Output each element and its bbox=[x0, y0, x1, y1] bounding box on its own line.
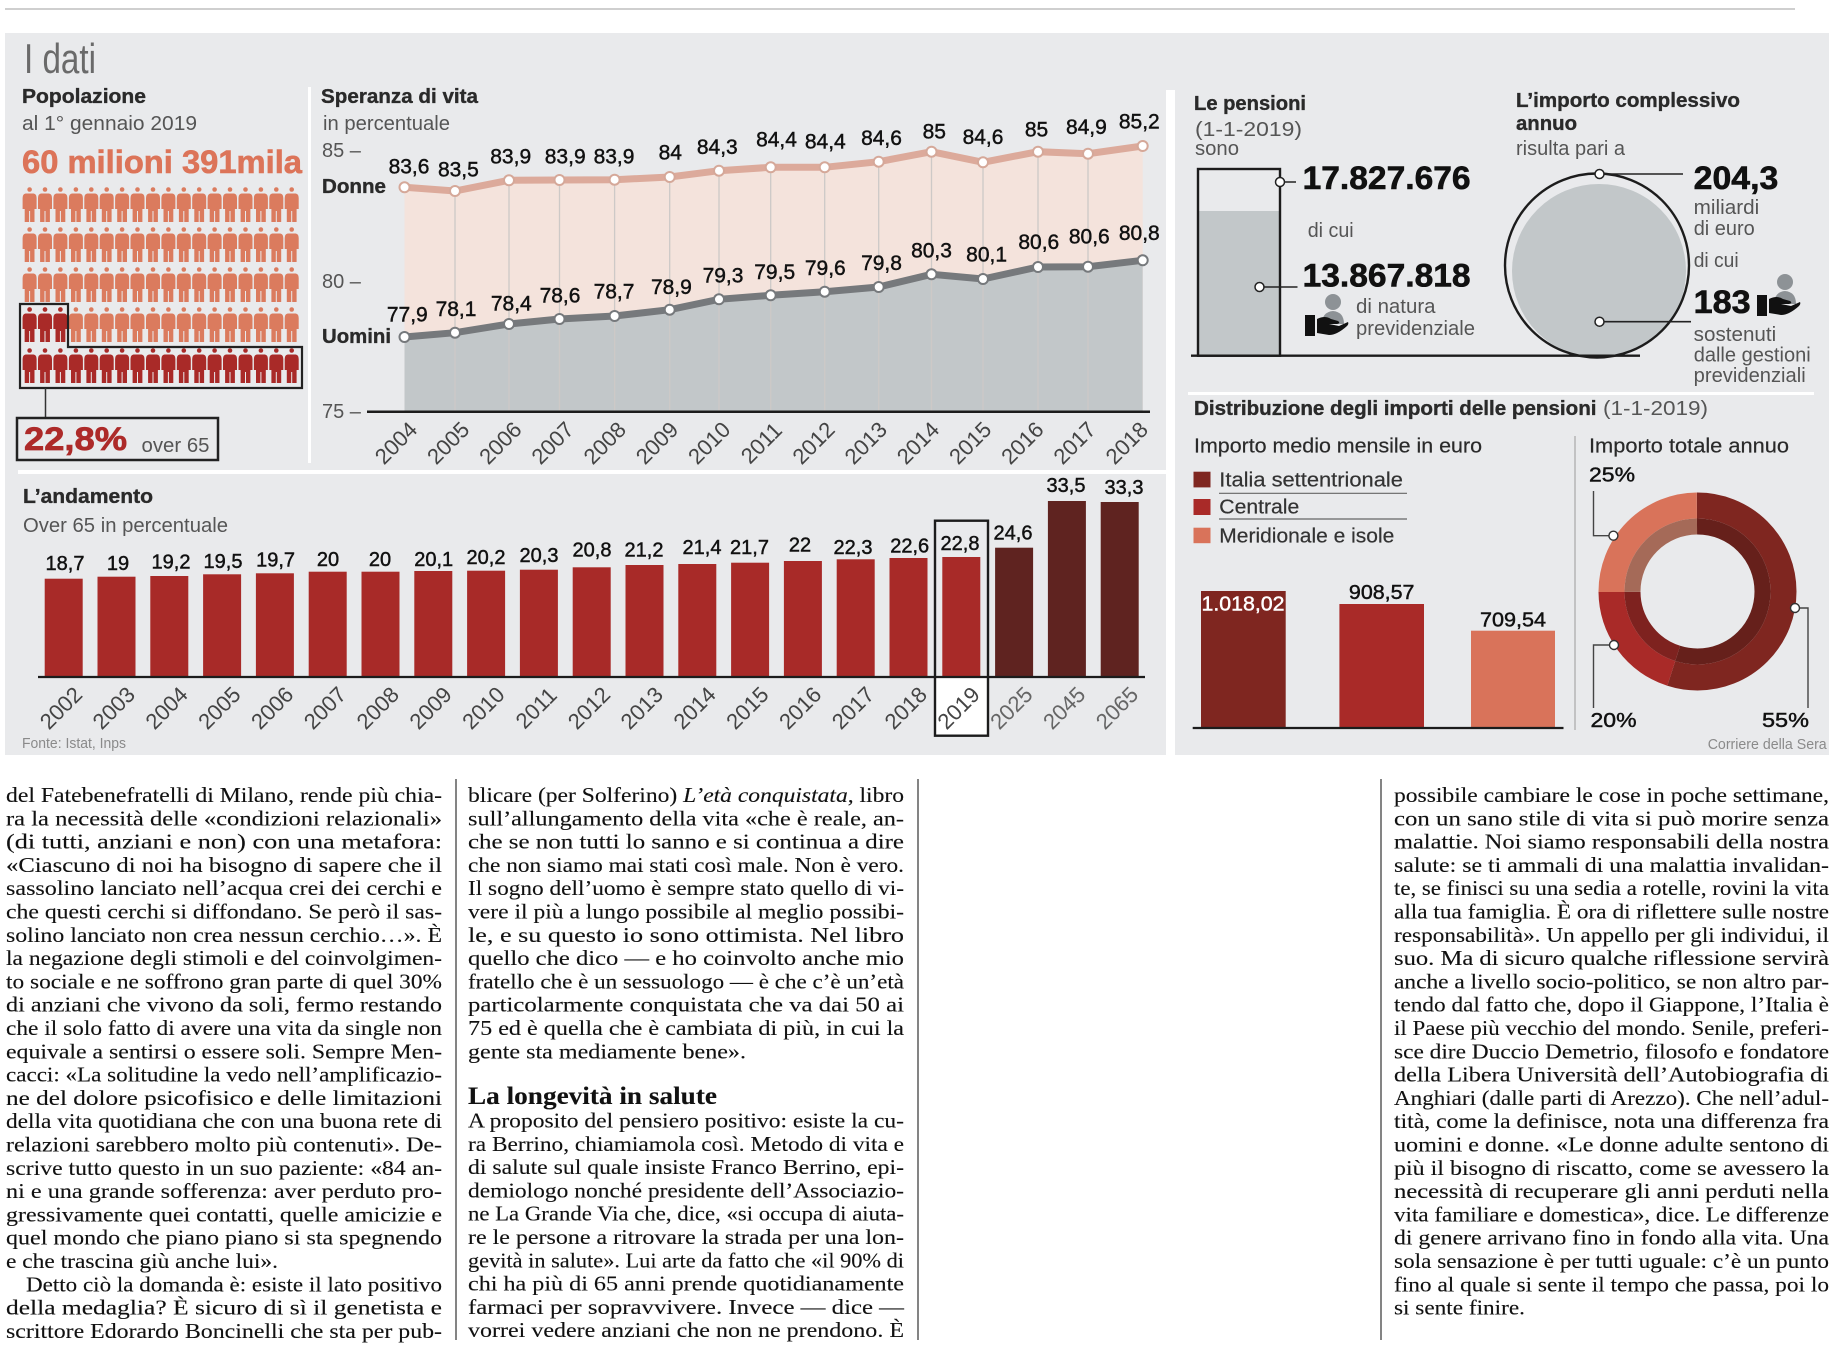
source note: Fonte: Istat, Inps bbox=[22, 735, 126, 752]
bar chart: average monthly amount: 908,57 bbox=[1349, 582, 1414, 604]
line chart: life expectancy: 83,5 bbox=[438, 159, 479, 182]
donut chart: total yearly amount: 55% bbox=[1762, 710, 1809, 732]
donut chart: total yearly amount: 25% bbox=[1589, 465, 1635, 487]
bar chart: over 65 share by year: 2009 bbox=[404, 682, 457, 734]
article column 1: (di tutti, anziani e non) con una metafora: bbox=[6, 830, 442, 854]
bar chart: average monthly amount: 709,54 bbox=[1480, 610, 1546, 632]
article column 1: della vita quotidiana che con una buona rete di bbox=[6, 1109, 442, 1133]
article column 4: sola sensazione è per tutti uguale: c’è un punto bbox=[1394, 1249, 1829, 1273]
line chart: life expectancy: 80,8 bbox=[1119, 222, 1160, 245]
label: di natura previdenziale: previdenziale bbox=[1356, 318, 1475, 340]
callout: 22,8% over 65: 22,8% bbox=[24, 421, 127, 457]
number: 183: 183 bbox=[1694, 284, 1751, 320]
subheading: importo medio: Importo medio mensile in euro bbox=[1194, 436, 1482, 458]
number: total pensions: 17.827.676 bbox=[1303, 160, 1471, 196]
article column 2: La longevità in salute bbox=[468, 1083, 717, 1110]
article column 4: uomini e donne. «Le donne adulte sentono di bbox=[1394, 1132, 1829, 1156]
heading: l'andamento: L’andamento bbox=[23, 486, 153, 508]
subheading: over 65 in percentuale: Over 65 in percentuale bbox=[23, 515, 228, 537]
line chart: life expectancy: 75 – bbox=[322, 401, 362, 423]
article column 1: sassolino lanciato nell’acqua crei dei cerchi e bbox=[6, 876, 442, 900]
label: sostenuti dalle gestioni previdenziali: previdenziali bbox=[1694, 365, 1806, 387]
line chart: life expectancy: 84 bbox=[659, 141, 682, 164]
circle: total amount bbox=[1505, 170, 1691, 358]
line chart: life expectancy: 85 bbox=[923, 120, 946, 143]
bar chart: over 65 share by year: 20,8 bbox=[573, 540, 611, 562]
subheading: in percentuale: in percentuale bbox=[323, 113, 450, 135]
line chart: life expectancy: 84,9 bbox=[1066, 116, 1107, 139]
bar chart: over 65 share by year: 2003 bbox=[88, 682, 140, 734]
article column 4: responsabilità». Un appello per gli individui, il bbox=[1394, 923, 1829, 947]
article column 2: particolarmente conquistata che va dai 50 ai bbox=[468, 993, 904, 1017]
article column 2: ne La Grande Via che, dice, «si occupa di aiuta- bbox=[468, 1202, 904, 1226]
title: I dati bbox=[24, 35, 96, 82]
line chart: life expectancy: 2017 bbox=[1048, 417, 1101, 469]
line chart: life expectancy: 84,6 bbox=[963, 126, 1003, 149]
bar chart: average monthly amount bbox=[1193, 582, 1564, 728]
bar chart: over 65 share by year: 2004 bbox=[140, 682, 193, 734]
article column 1: gressivamente quei contatti, quelle amicizie e bbox=[6, 1202, 442, 1226]
article column 2: fratello che è un sessuologo — è che c’è un’età bbox=[468, 969, 905, 993]
article column 4: più il bisogno di riscatto, come se avessero la bbox=[1394, 1156, 1830, 1180]
article column 4: fino al quale si sente il tempo che passa, poi lo bbox=[1394, 1272, 1829, 1296]
legend: Italia settentrionale bbox=[1219, 470, 1403, 492]
bar chart: over 65 share by year: 20 bbox=[317, 549, 339, 571]
line chart: life expectancy: 84,6 bbox=[861, 127, 902, 150]
panel: data background bbox=[5, 33, 1829, 755]
line chart: life expectancy: 80,6 bbox=[1069, 225, 1110, 248]
line chart: life expectancy: 78,9 bbox=[651, 276, 692, 299]
article column 1: ne del dolore psicofisico e delle limitazioni bbox=[6, 1086, 442, 1110]
line chart: life expectancy: 78,1 bbox=[436, 298, 476, 321]
bar chart: over 65 share by year: 22,3 bbox=[834, 537, 872, 559]
heading: le pensioni: Le pensioni bbox=[1194, 93, 1306, 115]
article column 2: di salute sul quale insiste Franco Berrino, epi- bbox=[468, 1155, 904, 1179]
heading: speranza di vita: Speranza di vita bbox=[321, 86, 479, 108]
article column 4: tità, come la definisce, nota una differenza fra bbox=[1394, 1109, 1830, 1133]
line chart: life expectancy: 2016 bbox=[996, 417, 1049, 469]
line chart: life expectancy: 83,9 bbox=[545, 145, 586, 168]
article column 4: anche a livello socio-politico, se non altro par- bbox=[1394, 969, 1829, 993]
icon: person on hand bbox=[1305, 294, 1348, 336]
bar chart: over 65 share by year: 33,5 bbox=[1047, 475, 1085, 497]
bar chart: over 65 share by year: 2025 bbox=[985, 682, 1038, 734]
article column 1: ra la necessità delle «condizioni relazionali» bbox=[6, 806, 442, 830]
article column 2: vere il più a lungo possibile al meglio possibi- bbox=[468, 900, 904, 924]
line chart: life expectancy: 2007 bbox=[526, 417, 579, 469]
line chart: life expectancy: 78,7 bbox=[594, 280, 634, 303]
line chart: life expectancy: 84,4 bbox=[805, 130, 846, 153]
bar chart: over 65 share by year: 2019 bbox=[932, 682, 985, 734]
line chart: life expectancy: 79,5 bbox=[754, 261, 795, 284]
panel: popolazione bbox=[17, 86, 302, 460]
line chart: life expectancy bbox=[322, 110, 1160, 469]
article column 4: di genere arrivano fino in fondo alla vita. Una bbox=[1394, 1226, 1830, 1250]
gauge: pensions bar bbox=[1198, 169, 1298, 356]
article column 4: possibile cambiare le cose in poche settimane, bbox=[1394, 783, 1829, 807]
callout: 22,8% over 65 bbox=[17, 418, 218, 460]
bar chart: over 65 share by year: 24,6 bbox=[994, 522, 1032, 544]
article column 2: sull’allungamento della vita «che è reale, an- bbox=[468, 806, 904, 830]
heading: distribuzione: (1-1-2019) bbox=[1603, 398, 1708, 420]
bar chart: over 65 share by year: 22 bbox=[789, 535, 811, 557]
bar chart: over 65 share by year: 21,2 bbox=[625, 540, 663, 562]
bar chart: over 65 share by year: 2012 bbox=[563, 682, 615, 734]
line chart: life expectancy: 80,3 bbox=[911, 239, 952, 262]
subheading: date: (1-1-2019) bbox=[1195, 119, 1302, 141]
article column 2: Il sogno dell’uomo è sempre stato quello di vi- bbox=[468, 876, 904, 900]
article column 1: e che trascina giù anche lui». bbox=[6, 1249, 278, 1273]
article column 1: la negazione degli stimoli e del coinvolgimen- bbox=[6, 946, 442, 970]
text: risulta pari a: risulta pari a bbox=[1516, 138, 1626, 160]
bar chart: over 65 share by year: 2018 bbox=[880, 682, 932, 734]
line chart: life expectancy: 83,9 bbox=[490, 145, 531, 168]
article column 4: necessità di recuperare gli anni perduti nella bbox=[1394, 1179, 1830, 1203]
bar chart: over 65 share by year: 2011 bbox=[511, 682, 562, 734]
line chart: life expectancy: 85 – bbox=[322, 140, 362, 162]
article column 1: che il solo fatto di avere una vita da single non bbox=[6, 1016, 443, 1040]
article column 2: blicare (per Solferino) L’età conquistata, libro bbox=[468, 783, 904, 807]
label: di natura previdenziale bbox=[1356, 296, 1475, 340]
line chart: life expectancy: 77,9 bbox=[387, 304, 428, 327]
label: miliardi di euro di cui: di euro bbox=[1694, 218, 1755, 240]
legend: Meridionale e isole bbox=[1219, 525, 1394, 547]
line chart: life expectancy: 85 bbox=[1025, 119, 1048, 142]
text: sono: sono bbox=[1195, 138, 1239, 160]
heading: importo complessivo annuo: L’importo complessivo bbox=[1516, 90, 1740, 112]
bar chart: over 65 share by year: 2006 bbox=[246, 682, 298, 734]
article column 1: relazioni sarebbero molto più contenuti». De- bbox=[6, 1132, 442, 1156]
bar chart: average monthly amount: 1.018,02 bbox=[1202, 594, 1284, 616]
article column 1: equivale a sentirsi o essere soli. Sempre Men- bbox=[6, 1039, 442, 1063]
line chart: life expectancy: 83,6 bbox=[389, 155, 429, 178]
panel: speranza di vita bbox=[321, 86, 1160, 469]
line chart: life expectancy: 78,6 bbox=[540, 285, 580, 308]
line chart: life expectancy: 79,6 bbox=[805, 257, 846, 280]
big number: population: 60 milioni 391mila bbox=[22, 144, 302, 180]
article column 4: della Libera Università dell’Autobiografia di bbox=[1394, 1063, 1829, 1087]
article column 4: te, se finisci su una sedia a rotelle, rovini la vita bbox=[1394, 876, 1830, 900]
panel: distribuzione bbox=[1193, 398, 1827, 753]
article column 1: di anziani che vivono da soli, fermo restando bbox=[6, 993, 442, 1017]
article column 1: cacci: «La solitudine la vedo nell’amplificazio- bbox=[6, 1063, 442, 1087]
bar chart: over 65 share by year: 2016 bbox=[774, 682, 826, 734]
bar chart: over 65 share by year: 19 bbox=[107, 553, 129, 575]
article column 1: scrive tutto questo in un suo paziente: «84 an- bbox=[6, 1156, 442, 1180]
line chart: life expectancy: Uomini bbox=[322, 326, 391, 348]
article column 4: vita familiare e domestica», dice. Le differenze bbox=[1394, 1202, 1829, 1226]
article column 4: suo. Ma di sicuro qualche riflessione servirà bbox=[1394, 946, 1830, 970]
article column 4: salute: se ti ammali di una malattia invalidan- bbox=[1394, 853, 1829, 877]
line chart: life expectancy: 79,3 bbox=[703, 265, 743, 288]
bar chart: over 65 share by year: 2013 bbox=[616, 682, 668, 734]
bar chart: over 65 share by year: 2010 bbox=[457, 682, 510, 734]
article column 1: Detto ciò la domanda è: esiste il lato positivo bbox=[26, 1272, 442, 1296]
line chart: life expectancy: 85,2 bbox=[1119, 110, 1160, 133]
article column 1: che questi cerchi si diffondano. Se però il sas- bbox=[6, 900, 442, 924]
donut chart: total yearly amount: 20% bbox=[1590, 710, 1637, 732]
legend: Centrale bbox=[1219, 496, 1299, 518]
heading: distribuzione: Distribuzione degli importi delle pensioni bbox=[1194, 398, 1596, 420]
bar chart: over 65 share by year bbox=[35, 475, 1145, 736]
bar chart: over 65 share by year: 2008 bbox=[352, 682, 404, 734]
article column 1 bbox=[6, 783, 443, 1343]
article column 2: quello che dico — e ho coinvolto anche mio bbox=[468, 946, 904, 970]
pictogram: people grid bbox=[20, 187, 302, 418]
article column 4: il Paese più vecchio del mondo. Senile, preferi- bbox=[1394, 1016, 1829, 1040]
article column 2: vorrei vedere anziani che non ne prendono. È bbox=[468, 1318, 904, 1342]
bar chart: over 65 share by year: 21,4 bbox=[683, 537, 721, 559]
article column 2: ra Berrino, chiamiamola così. Metodo di vita e bbox=[468, 1132, 904, 1156]
line chart: life expectancy: 80 – bbox=[322, 271, 362, 293]
article column 4: con un sano stile di vita si può morire senza bbox=[1394, 806, 1830, 830]
article column 4: Anghiari (dalle parti di Arezzo). Che nell’adul- bbox=[1394, 1086, 1829, 1110]
article column 1: to sociale e ne soffrono gran parte di quel 30% bbox=[6, 969, 442, 993]
article column 2: che se non tutti lo sanno e si continua a dire bbox=[468, 830, 904, 854]
credit: Corriere della Sera bbox=[1708, 736, 1827, 753]
panel: l'andamento bbox=[22, 475, 1145, 752]
article column 2: 75 ed è quella che è cambiata di più, in cui la bbox=[468, 1016, 905, 1040]
line chart: life expectancy: 2015 bbox=[944, 417, 996, 469]
article column 2: re le persone a ritrovare la strada per una lon- bbox=[468, 1225, 904, 1249]
article column 2: le, e su questo io sono ottimista. Nel libro bbox=[468, 923, 904, 947]
heading: popolazione: Popolazione bbox=[22, 86, 146, 108]
donut chart: total yearly amount bbox=[1589, 465, 1809, 732]
legend bbox=[1194, 470, 1407, 547]
line chart: life expectancy: Donne bbox=[322, 176, 386, 198]
bar chart: over 65 share by year: 19,5 bbox=[204, 551, 242, 573]
article column 2: gevità in salute». Lui arte da fatto che «il 90% di bbox=[468, 1248, 904, 1272]
article column 1: del Fatebenefratelli di Milano, rende più chia- bbox=[6, 783, 442, 807]
panel: importo complessivo bbox=[1505, 90, 1811, 387]
article column 1: della medaglia? È sicuro di sì il genetista e bbox=[6, 1296, 442, 1320]
bar chart: over 65 share by year: 20,1 bbox=[414, 549, 453, 571]
bar chart: over 65 share by year: 2017 bbox=[827, 682, 879, 734]
bar chart: over 65 share by year: 2014 bbox=[668, 682, 721, 734]
line chart: life expectancy: 2011 bbox=[736, 417, 787, 469]
line chart: life expectancy: 2009 bbox=[631, 417, 683, 469]
line chart: life expectancy: 2008 bbox=[579, 417, 631, 469]
article column 2: demiologo nonché presidente dell’Associazio- bbox=[468, 1178, 904, 1202]
number: 204,3: 204,3 bbox=[1694, 160, 1778, 196]
article column 1: «Ciascuno di noi ha bisogno di sapere che il bbox=[6, 853, 442, 877]
bar chart: over 65 share by year: 21,7 bbox=[730, 537, 769, 559]
label: sostenuti dalle gestioni previdenziali: dalle gestioni bbox=[1694, 345, 1811, 367]
label: miliardi di euro di cui: miliardi bbox=[1694, 197, 1759, 219]
bar chart: over 65 share by year: 2045 bbox=[1038, 682, 1090, 734]
line chart: life expectancy: 84,3 bbox=[697, 136, 738, 159]
line chart: life expectancy: 2013 bbox=[840, 417, 892, 469]
article column 4: alla tua famiglia. È ora di riflettere sulle nostre bbox=[1394, 900, 1829, 924]
article column 2: che non siamo mai stati così male. Non è vero. bbox=[468, 853, 904, 877]
heading: importo complessivo annuo: annuo bbox=[1516, 113, 1577, 135]
bar chart: over 65 share by year: 20 bbox=[369, 549, 391, 571]
line chart: life expectancy: 2004 bbox=[370, 417, 422, 469]
line chart: life expectancy: 79,8 bbox=[861, 252, 902, 275]
subheading: importo totale annuo: Importo totale annuo bbox=[1589, 436, 1789, 458]
article column 4: si sente finire. bbox=[1394, 1296, 1525, 1320]
bar chart: over 65 share by year: 22,6 bbox=[890, 535, 929, 557]
bar chart: over 65 share by year: 22,8 bbox=[941, 533, 979, 555]
article column 4 bbox=[1394, 783, 1830, 1320]
article column 2: A proposito del pensiero positivo: esiste la cu- bbox=[468, 1108, 904, 1132]
label: di natura previdenziale: di natura bbox=[1356, 296, 1436, 318]
bar chart: over 65 share by year: 2007 bbox=[299, 682, 351, 734]
line chart: life expectancy: 2014 bbox=[892, 417, 944, 469]
line chart: life expectancy: 84,4 bbox=[756, 129, 797, 152]
article column 1: ni e una grande sofferenza: aver perduto pro- bbox=[6, 1179, 442, 1203]
icon: person on hand bbox=[1757, 274, 1800, 316]
subheading: date: al 1° gennaio 2019 bbox=[22, 113, 197, 135]
label: sostenuti dalle gestioni previdenziali: sostenuti bbox=[1694, 324, 1776, 346]
article column 2: chi ha più di 65 anni prende quotidianamente bbox=[468, 1272, 904, 1296]
line chart: life expectancy: 2012 bbox=[787, 417, 840, 469]
label: sostenuti dalle gestioni previdenziali bbox=[1694, 324, 1811, 387]
article column 4: tendo dal fatto che, dopo il Giappone, l’Italia è bbox=[1394, 993, 1829, 1017]
line chart: life expectancy: 80,1 bbox=[966, 244, 1007, 267]
line chart: life expectancy: 2006 bbox=[474, 417, 527, 469]
article column 4: malattie. Noi siamo responsabili della nostra bbox=[1394, 830, 1830, 854]
bar chart: over 65 share by year: 33,3 bbox=[1105, 477, 1143, 499]
article column 2 bbox=[468, 783, 905, 1342]
article column 1: scrittore Edorardo Boncinelli che sta per pub- bbox=[6, 1319, 442, 1343]
heading: importo complessivo annuo bbox=[1516, 90, 1740, 135]
number: social security pensions: 13.867.818 bbox=[1303, 258, 1471, 294]
bar chart: over 65 share by year: 2065 bbox=[1091, 682, 1143, 734]
bar chart: over 65 share by year: 18,7 bbox=[46, 553, 84, 575]
text: di cui: di cui bbox=[1308, 220, 1354, 242]
bar chart: over 65 share by year: 2002 bbox=[35, 682, 87, 734]
bar chart: over 65 share by year: 19,2 bbox=[152, 551, 190, 573]
article column 1: solino lanciato non crea nessun cerchio…». È bbox=[6, 923, 442, 947]
article column 4: sce dire Duccio Demetrio, filosofo e fondatore bbox=[1394, 1039, 1829, 1063]
line chart: life expectancy: 83,9 bbox=[594, 145, 634, 168]
callout: 22,8% over 65: over 65 bbox=[142, 435, 210, 457]
line chart: life expectancy: 2018 bbox=[1101, 417, 1153, 469]
article column 2: gente sta mediamente bene». bbox=[468, 1039, 746, 1063]
label: miliardi di euro di cui: di cui bbox=[1694, 250, 1739, 272]
panel: le pensioni bbox=[1194, 93, 1475, 356]
line chart: life expectancy: 2005 bbox=[422, 417, 474, 469]
bar chart: over 65 share by year: 20,2 bbox=[467, 547, 505, 569]
article column 1: quel mondo che piano piano si sta spegnendo bbox=[6, 1226, 442, 1250]
line chart: life expectancy: 80,6 bbox=[1018, 231, 1059, 254]
bar chart: over 65 share by year: 20,3 bbox=[520, 545, 558, 567]
bar chart: over 65 share by year: 2015 bbox=[721, 682, 774, 734]
bar chart: over 65 share by year: 19,7 bbox=[256, 549, 295, 571]
line chart: life expectancy: 78,4 bbox=[491, 293, 532, 316]
label: miliardi di euro di cui bbox=[1694, 197, 1759, 272]
bar chart: over 65 share by year: 2005 bbox=[193, 682, 246, 734]
article column 2: farmaci per sopravvivere. Invece — dice — bbox=[468, 1295, 905, 1319]
line chart: life expectancy: 2010 bbox=[683, 417, 735, 469]
